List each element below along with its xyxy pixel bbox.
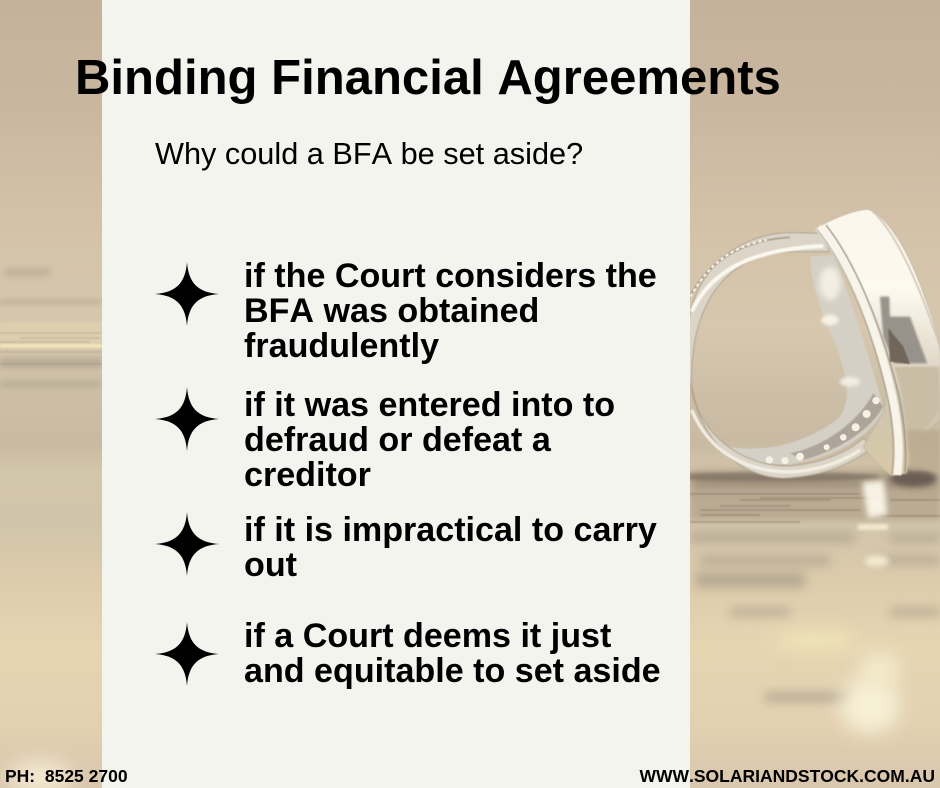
text: reason 4: if a Court deems it just [244, 617, 611, 655]
left strip grain [0, 268, 102, 388]
icon: sparkle 1 [155, 262, 219, 326]
footer: phone: PH: 8525 2700 [5, 766, 128, 786]
text: reason 2 [244, 386, 615, 494]
text: reason 1: fraudulently [244, 327, 439, 365]
right photo area [690, 472, 940, 733]
text: reason 1 [244, 257, 657, 365]
footer: website: WWW.SOLARIANDSTOCK.COM.AU [639, 766, 935, 786]
icon: sparkle 3 [155, 512, 219, 576]
text: reason 1: BFA was obtained [244, 292, 539, 330]
second ring band [816, 209, 940, 476]
icon: sparkle 2 [155, 387, 219, 451]
icon: sparkle 4 [155, 622, 219, 686]
text: reason 4 [244, 617, 661, 690]
text: reason 3 [244, 511, 657, 584]
text: reason 2: defraud or defeat a [244, 421, 551, 459]
text: reason 2: if it was entered into to [244, 386, 615, 424]
text: reason 1: if the Court considers the [244, 257, 657, 295]
text: reason 3: if it is impractical to carry [244, 511, 657, 549]
text: reason 2: creditor [244, 456, 371, 494]
panel: central off-white panel [102, 0, 690, 788]
subtitle: Why could a BFA be set aside? [155, 136, 583, 171]
text: reason 3: out [244, 546, 297, 584]
text: reason 4: and equitable to set aside [244, 652, 661, 690]
icon: rings [660, 209, 940, 487]
title: Binding Financial Agreements [75, 51, 781, 105]
